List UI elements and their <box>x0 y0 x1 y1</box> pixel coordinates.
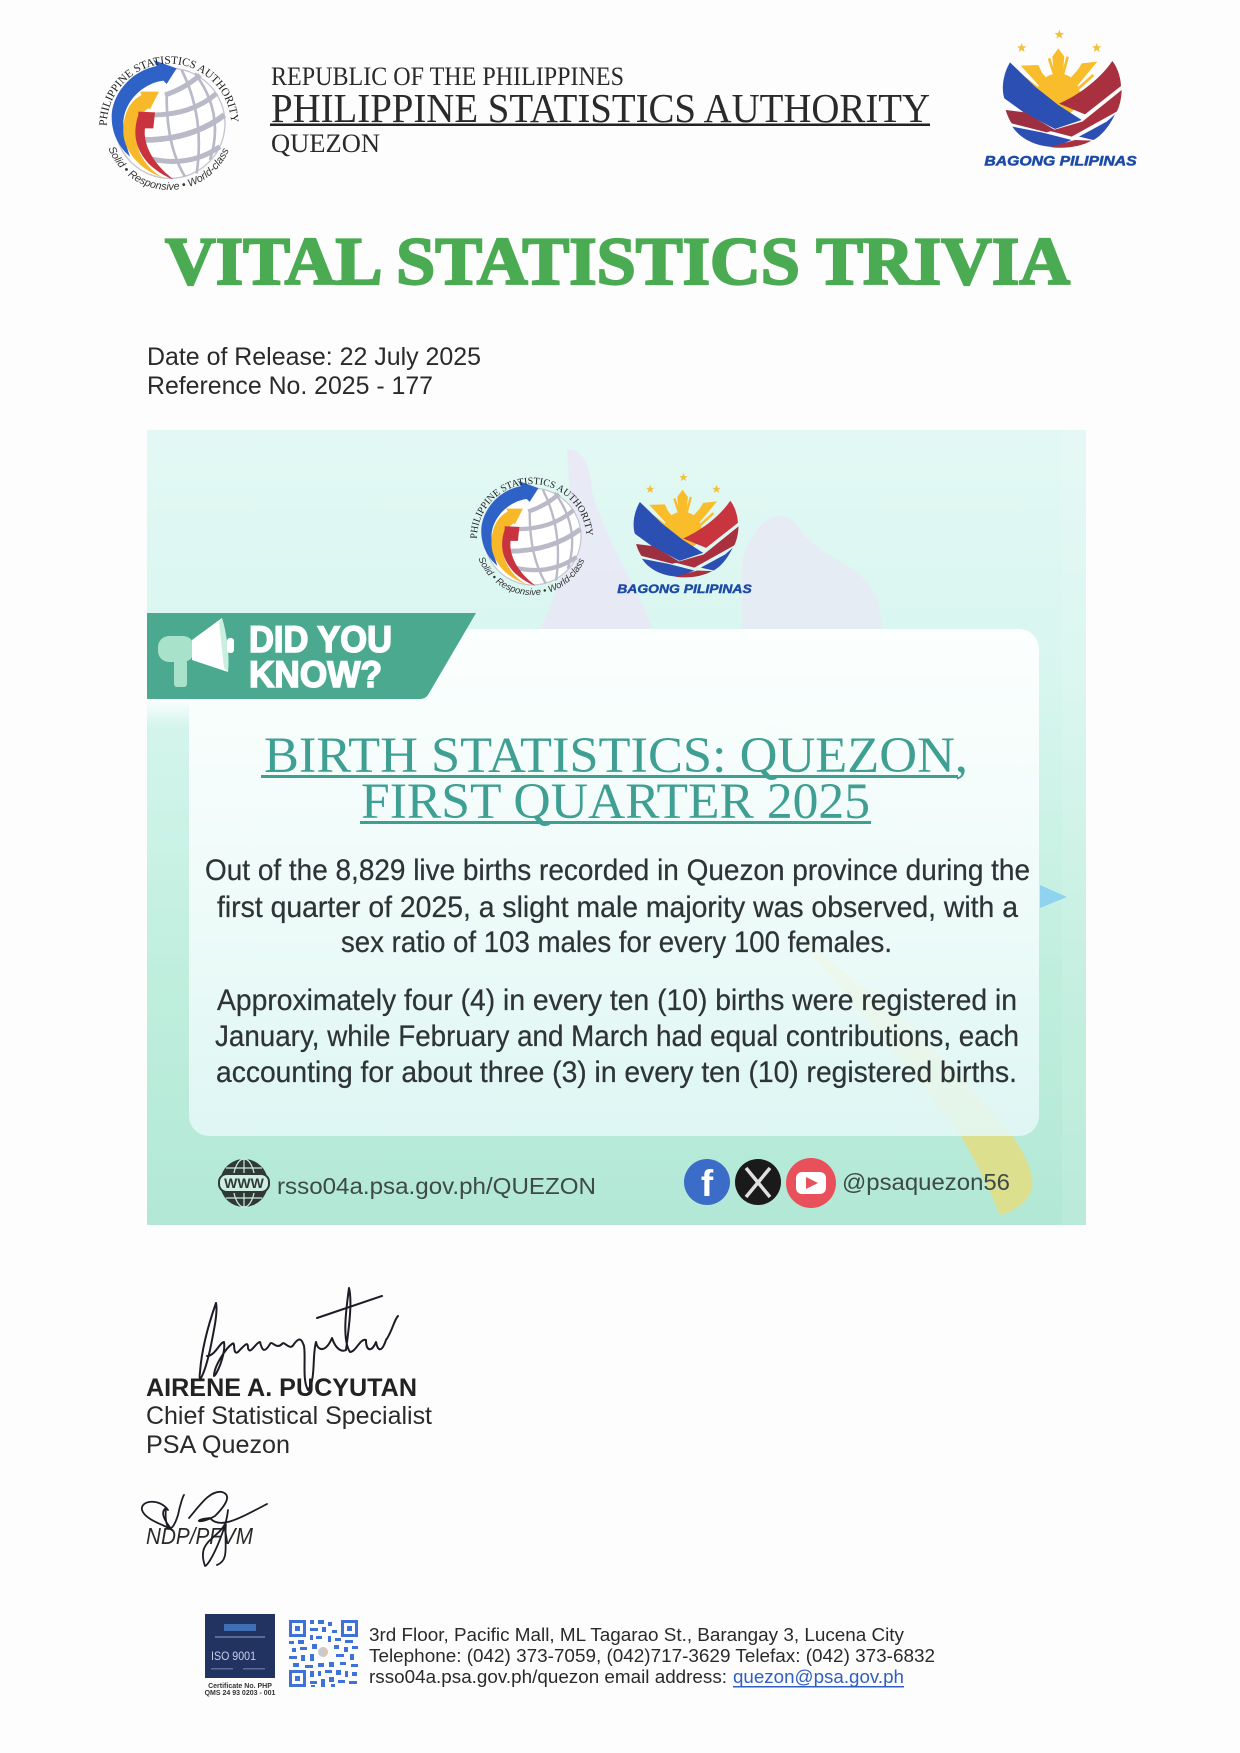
body text: monthly shares: January, while February and March had equal contributions, each <box>215 1020 1019 1053</box>
heading <box>261 728 968 830</box>
website link: rsso04a.psa.gov.ph/QUEZON <box>277 1173 596 1199</box>
logo: Bagong Pilipinas <box>984 30 1137 169</box>
signature block: Airene A. Pucyutan: Chief Statistical Specialist <box>146 1402 432 1430</box>
release date and reference number: Date of Release: 22 July 2025 <box>147 343 481 371</box>
signature: initials <box>142 1492 267 1566</box>
icon: www globe: WWW <box>224 1175 265 1191</box>
icon: facebook <box>684 1159 730 1205</box>
body text: sex ratio: Out of the 8,829 live births recorded in Quezon province during the <box>205 854 1030 887</box>
icon: YouTube <box>786 1158 836 1208</box>
letterhead text <box>270 62 930 158</box>
signature block: Airene A. Pucyutan: AIRENE A. PUCYUTAN <box>146 1374 417 1402</box>
banner: did you know <box>147 613 476 699</box>
badge: ISO 9001 certificate: ISO 9001 <box>211 1649 256 1663</box>
body text: monthly shares <box>215 984 1019 1089</box>
contact details: Telephone: (042) 373-7059, (042)717-3629 Telefax: (042) 373-6832 <box>369 1645 935 1666</box>
release date and reference number <box>147 343 481 400</box>
signature block: Airene A. Pucyutan: PSA Quezon <box>146 1431 290 1459</box>
body text: monthly shares: Approximately four (4) in every ten (10) births were registered in <box>217 984 1017 1017</box>
white content card <box>189 629 1039 1136</box>
letterhead text: REPUBLIC OF THE PHILIPPINES <box>271 62 624 91</box>
badge: ISO 9001 certificate: Certificate No. PHP <box>208 1683 272 1690</box>
contact details: rsso04a.psa.gov.ph/quezon email address: <box>369 1666 727 1687</box>
panel: did you know <box>147 430 1086 1225</box>
logo: PSA seal small <box>470 478 593 596</box>
QR code <box>289 1620 358 1687</box>
website link <box>219 1159 596 1207</box>
letterhead text: PHILIPPINE STATISTICS AUTHORITY <box>271 85 930 131</box>
heading: BIRTH STATISTICS: QUEZON, <box>264 728 968 784</box>
logo: Bagong Pilipinas: BAGONG PILIPINAS <box>984 153 1137 169</box>
logo: Philippine Statistics Authority seal <box>99 56 239 190</box>
banner: did you know: KNOW? <box>249 654 382 695</box>
signature block: Airene A. Pucyutan <box>146 1288 432 1459</box>
body text: sex ratio: first quarter of 2025, a slight male majority was observed, with a <box>217 891 1018 924</box>
body text: sex ratio <box>205 854 1030 959</box>
title: VITAL STATISTICS TRIVIA <box>165 223 1070 299</box>
initials: NDP/PFVM <box>142 1492 267 1566</box>
release date and reference number: Reference No. 2025 - 177 <box>147 372 433 400</box>
logo: Philippine Statistics Authority seal: PHILIPPINE STATISTICS AUTHORITY <box>99 56 239 126</box>
initials: NDP/PFVM: NDP/PFVM <box>146 1523 254 1549</box>
letterhead text: QUEZON <box>271 129 380 158</box>
badge: ISO 9001 certificate <box>205 1614 276 1697</box>
logo: Philippine Statistics Authority seal: Solid • Responsive • World-class <box>109 147 228 190</box>
map of Quezon <box>540 449 1067 1215</box>
logo: PSA seal small: PHILIPPINE STATISTICS AUTHORITY <box>470 478 593 538</box>
contact details: 3rd Floor, Pacific Mall, ML Tagarao St., Barangay 3, Lucena City <box>369 1624 905 1645</box>
social media links: @psaquezon56 <box>842 1169 1010 1195</box>
body text: monthly shares: accounting for about three (3) in every ten (10) registered births. <box>216 1056 1017 1089</box>
icon: www globe <box>219 1159 269 1207</box>
contact details <box>369 1624 935 1688</box>
icon: megaphone <box>158 618 234 687</box>
icon: X <box>735 1159 781 1205</box>
heading: FIRST QUARTER 2025 <box>361 774 870 830</box>
icon: facebook: f <box>701 1163 714 1204</box>
logo: Bagong Pilipinas small: BAGONG PILIPINAS <box>617 582 753 596</box>
banner: did you know: DID YOU <box>249 619 392 660</box>
contact details: quezon@psa.gov.ph <box>733 1666 904 1687</box>
body text: sex ratio: sex ratio of 103 males for every 100 females. <box>341 926 892 959</box>
signature <box>200 1288 398 1390</box>
badge: ISO 9001 certificate: QMS 24 93 0203 - 001 <box>205 1690 276 1697</box>
logo: PSA seal small: Solid • Responsive • World-class <box>479 558 584 596</box>
social media links <box>684 1158 1010 1208</box>
logo: Bagong Pilipinas small <box>617 473 753 596</box>
